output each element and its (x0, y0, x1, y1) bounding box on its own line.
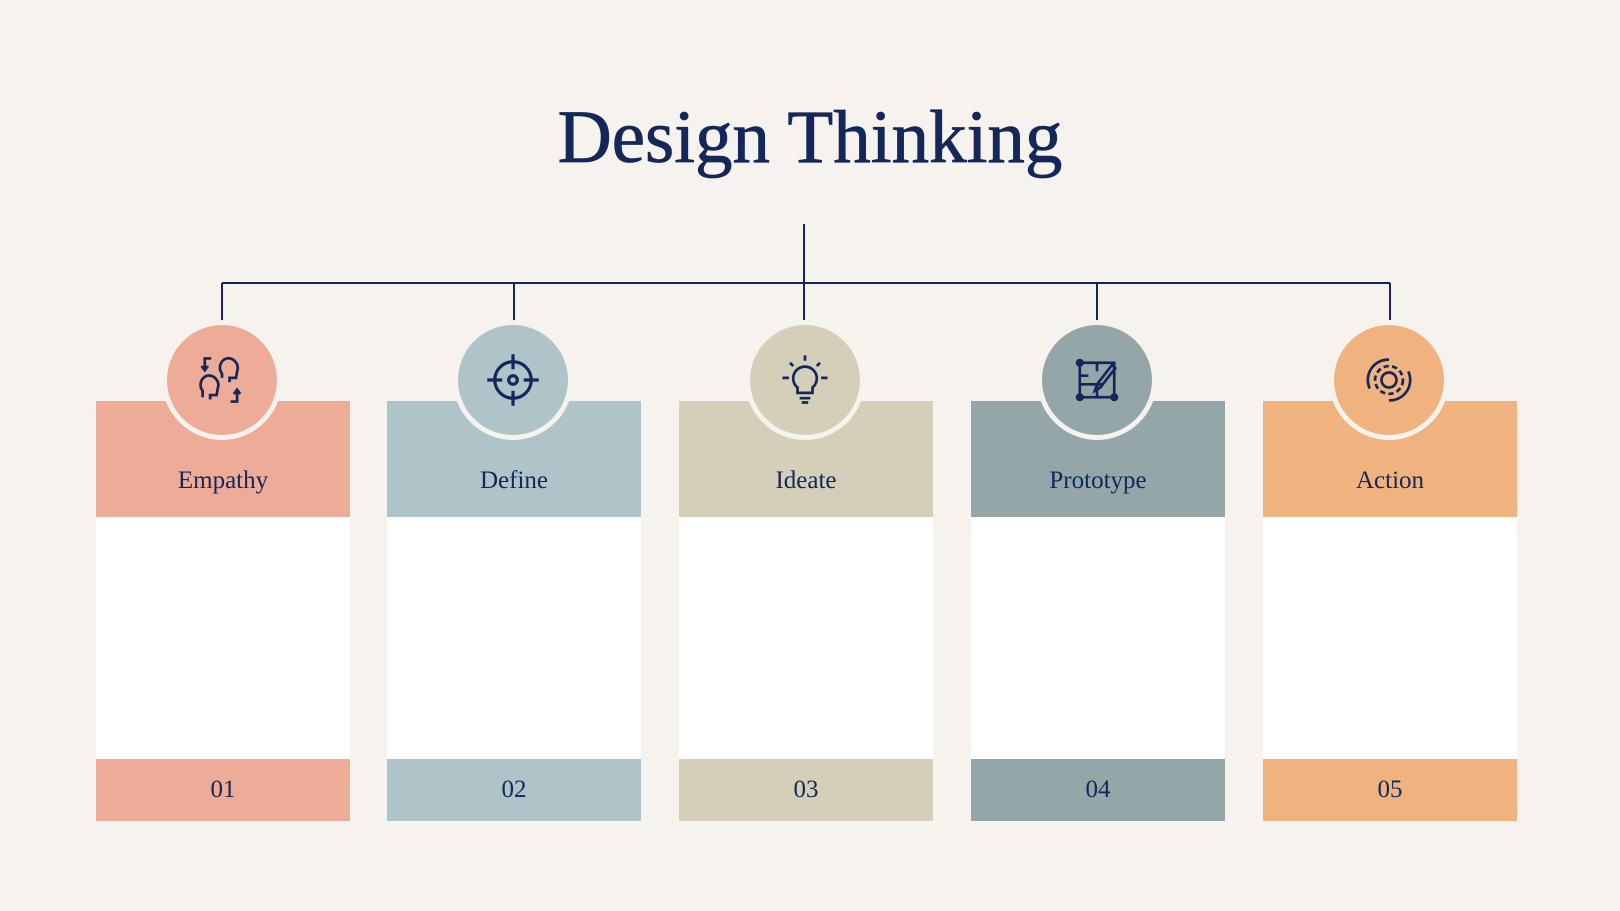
card: Define: 02 (502, 776, 526, 803)
card: Action: 05 (1378, 776, 1402, 803)
card: Action (1263, 320, 1517, 821)
card: Define: Define (480, 467, 548, 494)
icon: wireframe pen (1037, 320, 1157, 440)
card: Empathy (96, 320, 350, 821)
icon: target (453, 320, 573, 440)
card: Ideate: Ideate (775, 467, 837, 494)
card: Empathy: 01 (210, 776, 236, 803)
card: Prototype: Prototype (1049, 467, 1147, 494)
card: Prototype (971, 320, 1225, 821)
card: Empathy: Empathy (178, 467, 268, 494)
card: Prototype: 04 (1086, 776, 1110, 803)
icon: gear cycle (1329, 320, 1449, 440)
card: Ideate: 03 (794, 776, 818, 803)
card: Action: Action (1356, 467, 1424, 494)
icon: lightbulb (745, 320, 865, 440)
card: Ideate (679, 320, 933, 821)
card: Define (387, 320, 641, 821)
title: Design Thinking (558, 96, 1062, 179)
icon: heads exchange (162, 320, 282, 440)
